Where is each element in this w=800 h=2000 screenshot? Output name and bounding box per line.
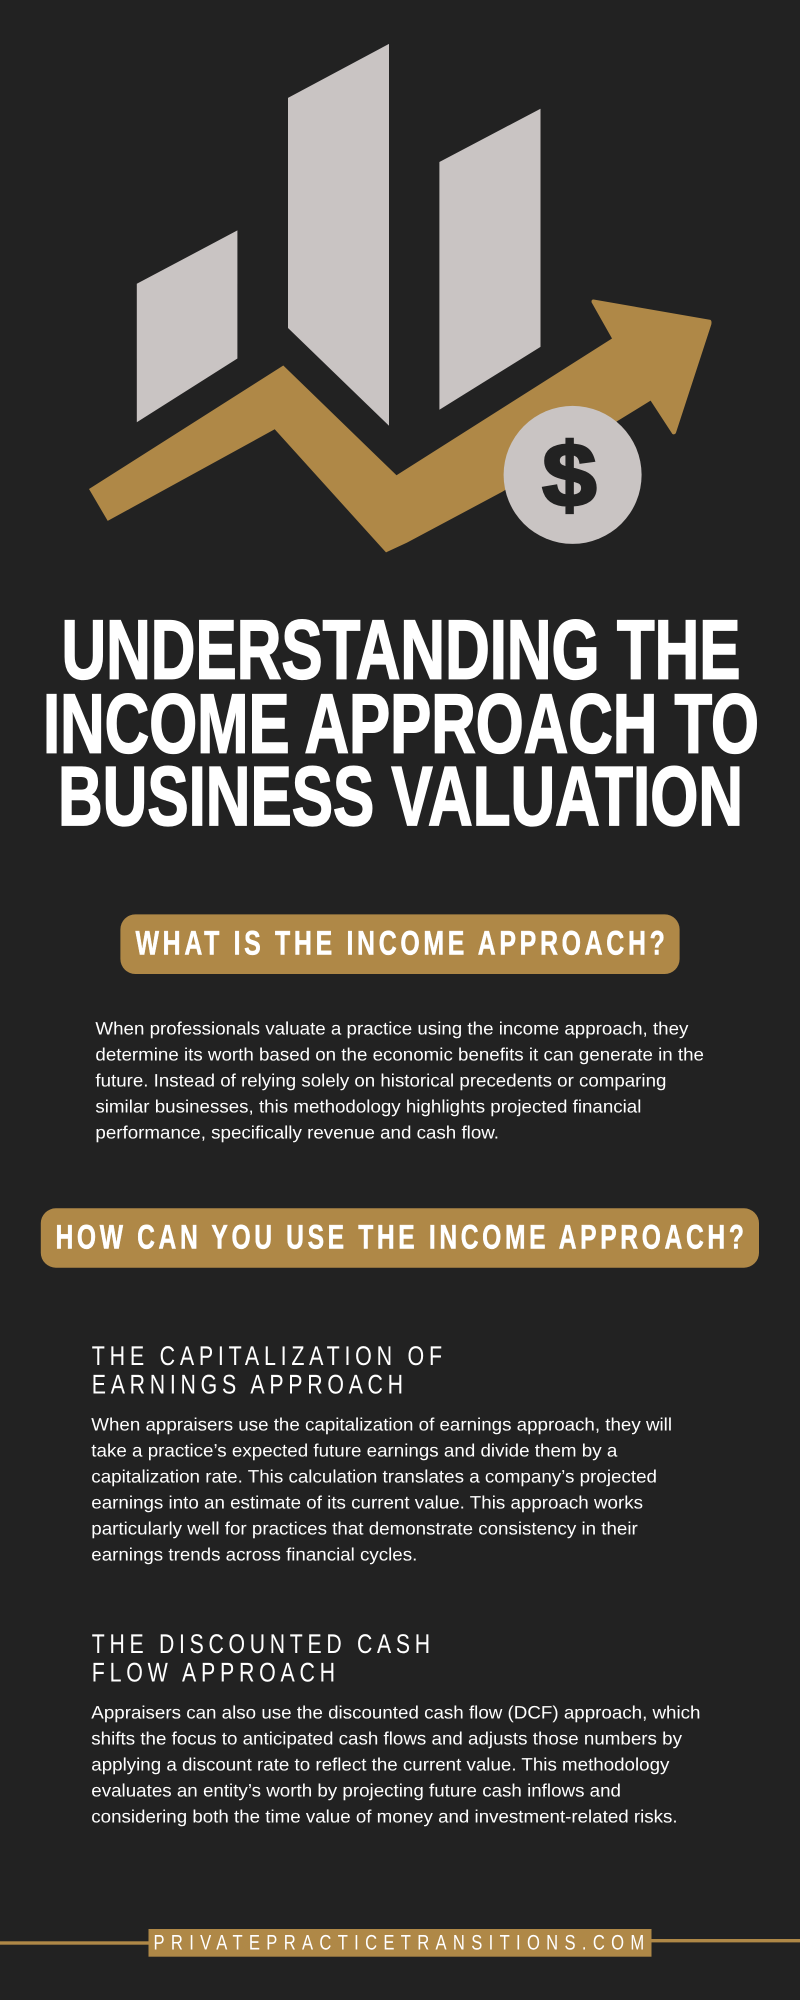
text block: discounted cash flow description: considering both the time value of money and investment-related risks. bbox=[91, 1807, 678, 1827]
subheading: discounted cash flow: FLOW APPROACH bbox=[92, 1658, 340, 1688]
icon: dollar sign: $ bbox=[542, 426, 596, 526]
text block: discounted cash flow description: shifts the focus to anticipated cash flows and adjusts those numbers by bbox=[91, 1729, 682, 1749]
text block: discounted cash flow description: evaluates an entity’s worth by projecting future cash inflows and bbox=[91, 1781, 621, 1801]
text block: capitalization of earnings description: earnings into an estimate of its current value. This approach works bbox=[91, 1493, 643, 1513]
heading pill: what is the income approach bbox=[120, 914, 680, 974]
subheading: capitalization of earnings: THE CAPITALIZATION OF bbox=[92, 1341, 447, 1371]
subheading: capitalization of earnings bbox=[92, 1341, 447, 1400]
heading pill: how can you use the income approach bbox=[41, 1208, 759, 1268]
text block: income approach definition: future. Instead of relying solely on historical precedents or comparing bbox=[95, 1070, 666, 1090]
text block: discounted cash flow description: Appraisers can also use the discounted cash flow (DCF) approach, which bbox=[91, 1703, 701, 1723]
text block: income approach definition: determine its worth based on the economic benefits it can generate in the bbox=[95, 1044, 704, 1064]
text block: income approach definition: When professionals valuate a practice using the income approach, they bbox=[95, 1018, 688, 1038]
text block: capitalization of earnings description: earnings trends across financial cycles. bbox=[91, 1545, 417, 1565]
text block: capitalization of earnings description: When appraisers use the capitalization of earnings approach, they will bbox=[91, 1415, 672, 1435]
icon: medium bar bbox=[439, 109, 540, 410]
icon: tall bar bbox=[288, 44, 389, 426]
footer: website banner bbox=[0, 1929, 800, 1957]
text block: capitalization of earnings description: take a practice’s expected future earnings and divide them by a bbox=[91, 1441, 618, 1461]
icon: short bar bbox=[137, 230, 237, 422]
title bbox=[43, 602, 759, 843]
text block: capitalization of earnings description: particularly well for practices that demonstrate consistency in their bbox=[91, 1519, 638, 1539]
subheading: discounted cash flow: THE DISCOUNTED CASH bbox=[92, 1629, 435, 1659]
icon: rising arrow bbox=[89, 300, 712, 552]
icon: coin bbox=[504, 406, 642, 544]
text block: discounted cash flow description: applying a discount rate to reflect the current value. This methodology bbox=[91, 1755, 669, 1775]
footer: website banner: PRIVATEPRACTICETRANSITIONS.COM bbox=[154, 1932, 650, 1954]
text block: capitalization of earnings description: capitalization rate. This calculation translates a company’s projected bbox=[91, 1467, 657, 1487]
subheading: discounted cash flow bbox=[92, 1629, 435, 1688]
text block: income approach definition bbox=[95, 1018, 704, 1142]
subsection: discounted cash flow approach bbox=[91, 1629, 701, 1827]
subheading: capitalization of earnings: EARNINGS APPROACH bbox=[92, 1370, 408, 1400]
icon: bar chart with rising arrow and dollar coin bbox=[89, 44, 712, 552]
text block: income approach definition: performance, specifically revenue and cash flow. bbox=[95, 1122, 499, 1142]
text block: capitalization of earnings description bbox=[91, 1415, 672, 1565]
text block: discounted cash flow description bbox=[91, 1703, 701, 1827]
subsection: capitalization of earnings approach bbox=[91, 1341, 672, 1565]
text block: income approach definition: similar businesses, this methodology highlights projected financial bbox=[95, 1096, 641, 1116]
